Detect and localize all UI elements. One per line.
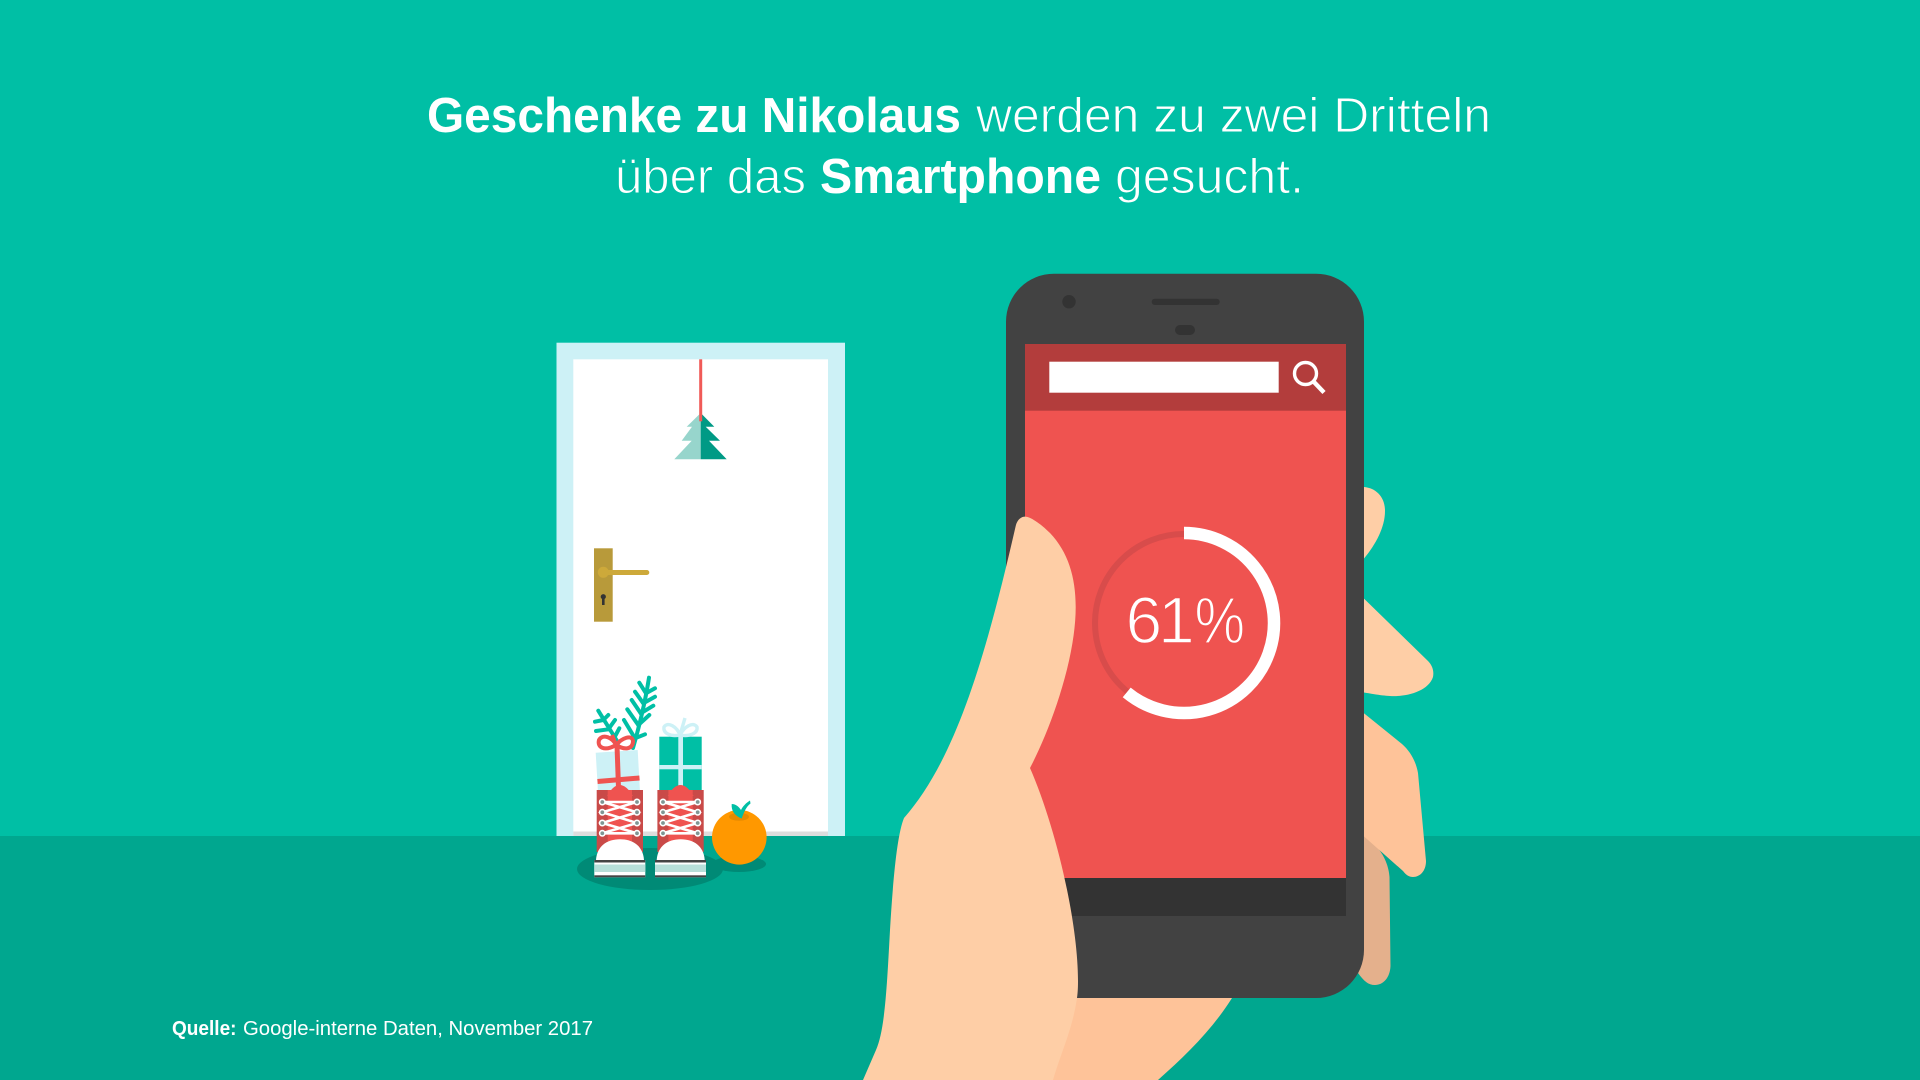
hanging tree ornament <box>674 359 727 459</box>
search icon <box>1294 362 1324 392</box>
search field <box>1049 362 1279 393</box>
title <box>427 89 1491 204</box>
orange <box>712 800 767 872</box>
title: über das <box>615 150 806 204</box>
door handle <box>594 548 649 622</box>
finger 2 <box>1350 585 1433 696</box>
phone body <box>1006 274 1364 998</box>
finger 1 <box>1350 487 1385 570</box>
thumb <box>863 517 1078 1080</box>
door frame <box>556 343 845 836</box>
door <box>556 343 845 836</box>
progress ring 61%: 1 <box>1158 583 1195 657</box>
title: gesucht. <box>1115 150 1304 204</box>
boot: right <box>655 785 706 877</box>
screen <box>1025 344 1346 878</box>
progress ring 61%: % <box>1194 583 1245 657</box>
sensor <box>1175 325 1195 335</box>
source note: Quelle: <box>172 1018 236 1040</box>
boot: left <box>594 785 645 877</box>
palm <box>1040 990 1240 1080</box>
title: Smartphone <box>820 150 1101 204</box>
floor shadow <box>577 848 723 890</box>
gift: left <box>596 735 640 792</box>
title: werden zu zwei Dritteln <box>975 89 1491 143</box>
nav bar <box>1025 878 1346 916</box>
boots, gifts and orange <box>577 678 767 890</box>
camera <box>1062 295 1076 308</box>
finger 4 <box>1340 805 1390 985</box>
search header <box>1025 344 1346 411</box>
progress ring 61%: 6 <box>1126 583 1162 657</box>
finger 3 <box>1350 702 1426 877</box>
hand behind phone <box>1040 487 1433 1080</box>
progress ring 61% <box>1095 533 1274 713</box>
fir branches <box>595 678 655 748</box>
door leaf <box>573 359 828 836</box>
gift: right <box>659 718 702 792</box>
phone <box>1006 274 1364 998</box>
source note: Google-interne Daten, November 2017 <box>243 1018 593 1040</box>
title: Geschenke zu Nikolaus <box>427 89 961 143</box>
speaker <box>1152 299 1220 305</box>
